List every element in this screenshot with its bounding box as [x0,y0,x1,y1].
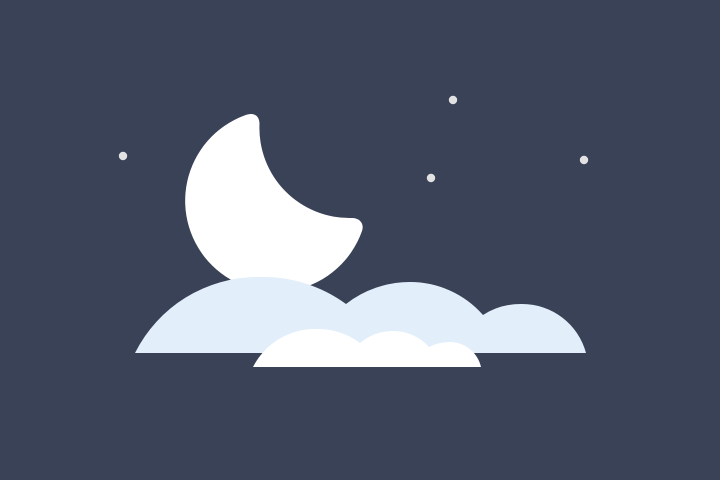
back cloud [135,277,586,353]
stars [119,96,588,182]
front cloud [253,329,481,367]
icon: crescent moon [185,114,363,292]
